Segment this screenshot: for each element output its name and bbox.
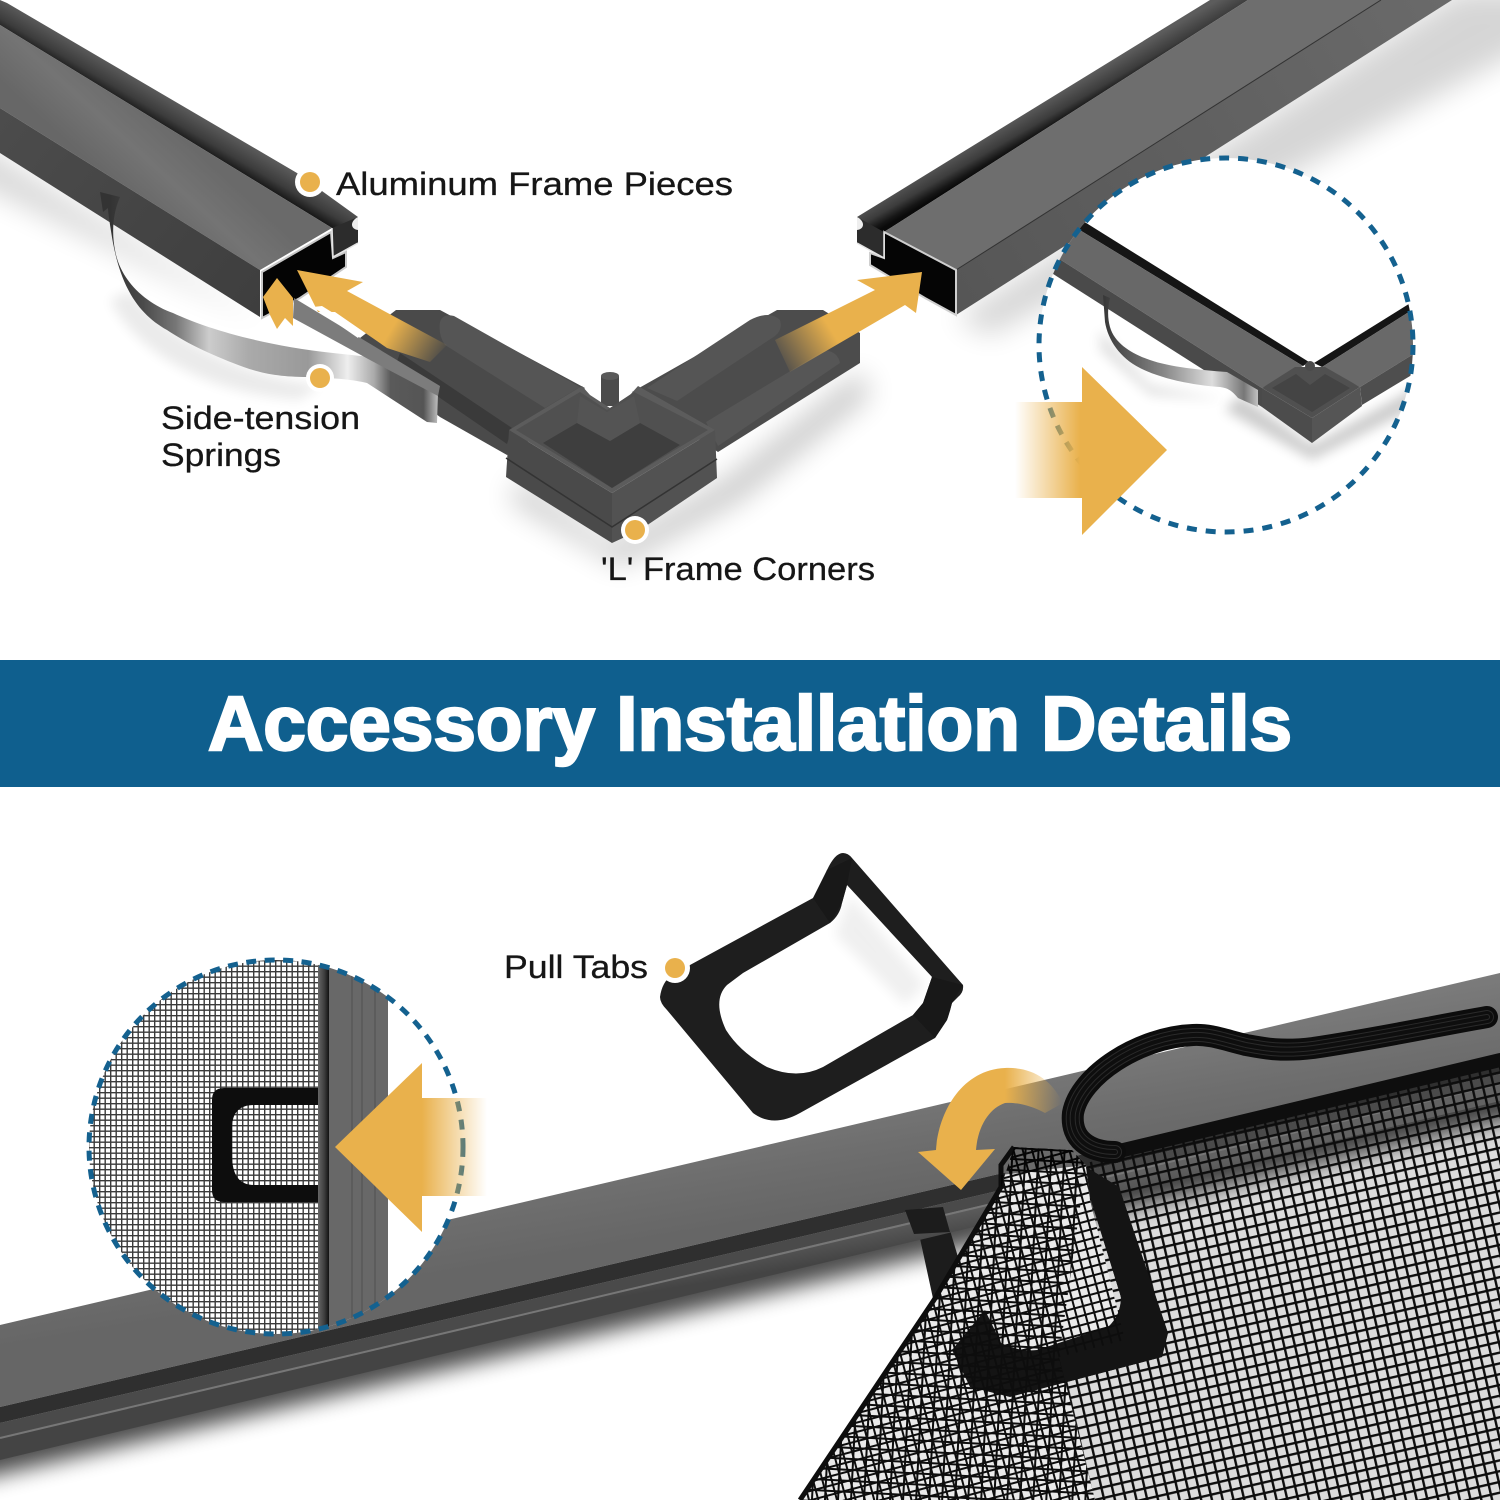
- inset tab: [212, 1088, 318, 1202]
- pull tab strap on rail: [905, 1207, 950, 1234]
- arrow: to inset: [335, 1063, 487, 1232]
- label: side-tension springs: Springs: [161, 437, 281, 473]
- label dot: aluminum frame pieces: [295, 167, 325, 197]
- banner: [0, 660, 1500, 787]
- L frame corner: [360, 310, 860, 543]
- pull tab: [660, 853, 963, 1120]
- lip edge highlight: [332, 228, 358, 257]
- frame face: [329, 955, 388, 1340]
- box floor: [543, 423, 680, 488]
- right top: [1322, 312, 1413, 387]
- box seam: [506, 458, 717, 527]
- circle fill: [1039, 158, 1413, 532]
- right arm: [632, 310, 860, 452]
- rail top face: [0, 973, 1500, 1407]
- left lip: [1078, 221, 1309, 366]
- rail mid band: [0, 1074, 1500, 1437]
- side face: [956, 0, 1452, 315]
- rail dark channel: [0, 1057, 1500, 1423]
- corner: [1262, 361, 1362, 443]
- assembled frame: [1050, 221, 1420, 460]
- title: Accessory Installation Details: [208, 681, 1292, 767]
- spring: [1103, 295, 1258, 407]
- end opening: [870, 232, 956, 315]
- label dot: side-tension springs: [306, 364, 334, 392]
- arrow: small arrow at spring: [263, 278, 293, 329]
- lip: [857, 0, 1248, 258]
- side face: [0, 108, 260, 317]
- arrow: curved insertion arrow: [918, 1068, 1063, 1190]
- left aluminum frame piece: [0, 0, 358, 318]
- mesh backing below rail: [800, 1060, 1500, 1500]
- spring arm: [293, 298, 440, 396]
- rail highlight: [0, 1084, 1500, 1438]
- arrow: to inset detail: [1015, 367, 1167, 535]
- lip end: [332, 217, 358, 257]
- lip hook highlight: [352, 217, 358, 230]
- fine mesh: [85, 955, 318, 1340]
- circle fill: [89, 960, 463, 1334]
- spline cord: [1073, 1017, 1500, 1152]
- top face: [0, 25, 332, 270]
- frame brushed streaks: [352, 955, 375, 1340]
- right lip: [1314, 304, 1410, 367]
- bottom aluminum rail: [0, 973, 1500, 1460]
- main mesh: [1040, 1066, 1500, 1500]
- box inner walls: [516, 392, 708, 488]
- lip edge highlight: [857, 232, 884, 258]
- edge line: [956, 0, 1381, 270]
- panel: exploded frame assembly: [0, 0, 1500, 587]
- rail shadow: [0, 1050, 1500, 1498]
- left arm ridge: [440, 315, 580, 408]
- panel: pull tab and screen installation: [0, 853, 1500, 1500]
- dashed circle: [1039, 158, 1413, 532]
- label: aluminum frame pieces: Aluminum Frame Pieces: [336, 166, 733, 202]
- box rim: [509, 386, 715, 493]
- label dot: pull tabs: [660, 953, 690, 983]
- arrow: into left frame: [297, 270, 447, 362]
- inset: pull tab on screen: [85, 955, 463, 1340]
- pull tab back strap: [905, 1207, 961, 1303]
- dashed circle: [89, 960, 463, 1334]
- left arm: [360, 310, 585, 455]
- fold shading: [813, 858, 852, 923]
- right arm ridge: [647, 315, 781, 401]
- arrow: into right frame: [775, 272, 922, 372]
- inset: assembled corner detail: [1039, 158, 1420, 532]
- spring strap: [100, 192, 438, 423]
- label dot: L frame corners: [621, 516, 649, 544]
- end opening: [262, 232, 346, 318]
- lip end: [857, 217, 884, 258]
- label: pull tabs: Pull Tabs: [504, 949, 648, 985]
- lip hook highlight: [857, 217, 863, 230]
- right side: [1360, 354, 1413, 405]
- left top: [1050, 229, 1303, 388]
- tab seen through mesh: [952, 1167, 1168, 1397]
- soft shadows under frame: [0, 0, 1500, 565]
- rail lower band: [0, 1083, 1500, 1460]
- label: side-tension springs: [161, 400, 360, 473]
- mesh area re-lighten at lower screen: [1090, 1160, 1500, 1500]
- side-tension spring: [100, 192, 440, 423]
- top face: [884, 0, 1381, 270]
- folded mesh: [800, 1147, 1168, 1500]
- lip: [0, 0, 358, 257]
- label: side-tension springs: Side-tension: [161, 400, 360, 436]
- inner L wall: [577, 396, 640, 441]
- soft shadow inside pull tab: [835, 895, 925, 1005]
- inset contents: [85, 955, 388, 1340]
- left side: [1050, 253, 1262, 407]
- right aluminum frame piece: [857, 0, 1452, 315]
- right arm lower ridge: [706, 350, 840, 446]
- left arm lower groove: [395, 353, 512, 444]
- pin: [601, 372, 619, 406]
- spring white gap highlight: [313, 306, 362, 338]
- label: L frame corners: 'L' Frame Corners: [601, 551, 875, 587]
- box left face: [506, 430, 612, 543]
- screen mesh: [800, 1066, 1500, 1500]
- box right face: [612, 430, 717, 543]
- frame edge: [318, 955, 329, 1340]
